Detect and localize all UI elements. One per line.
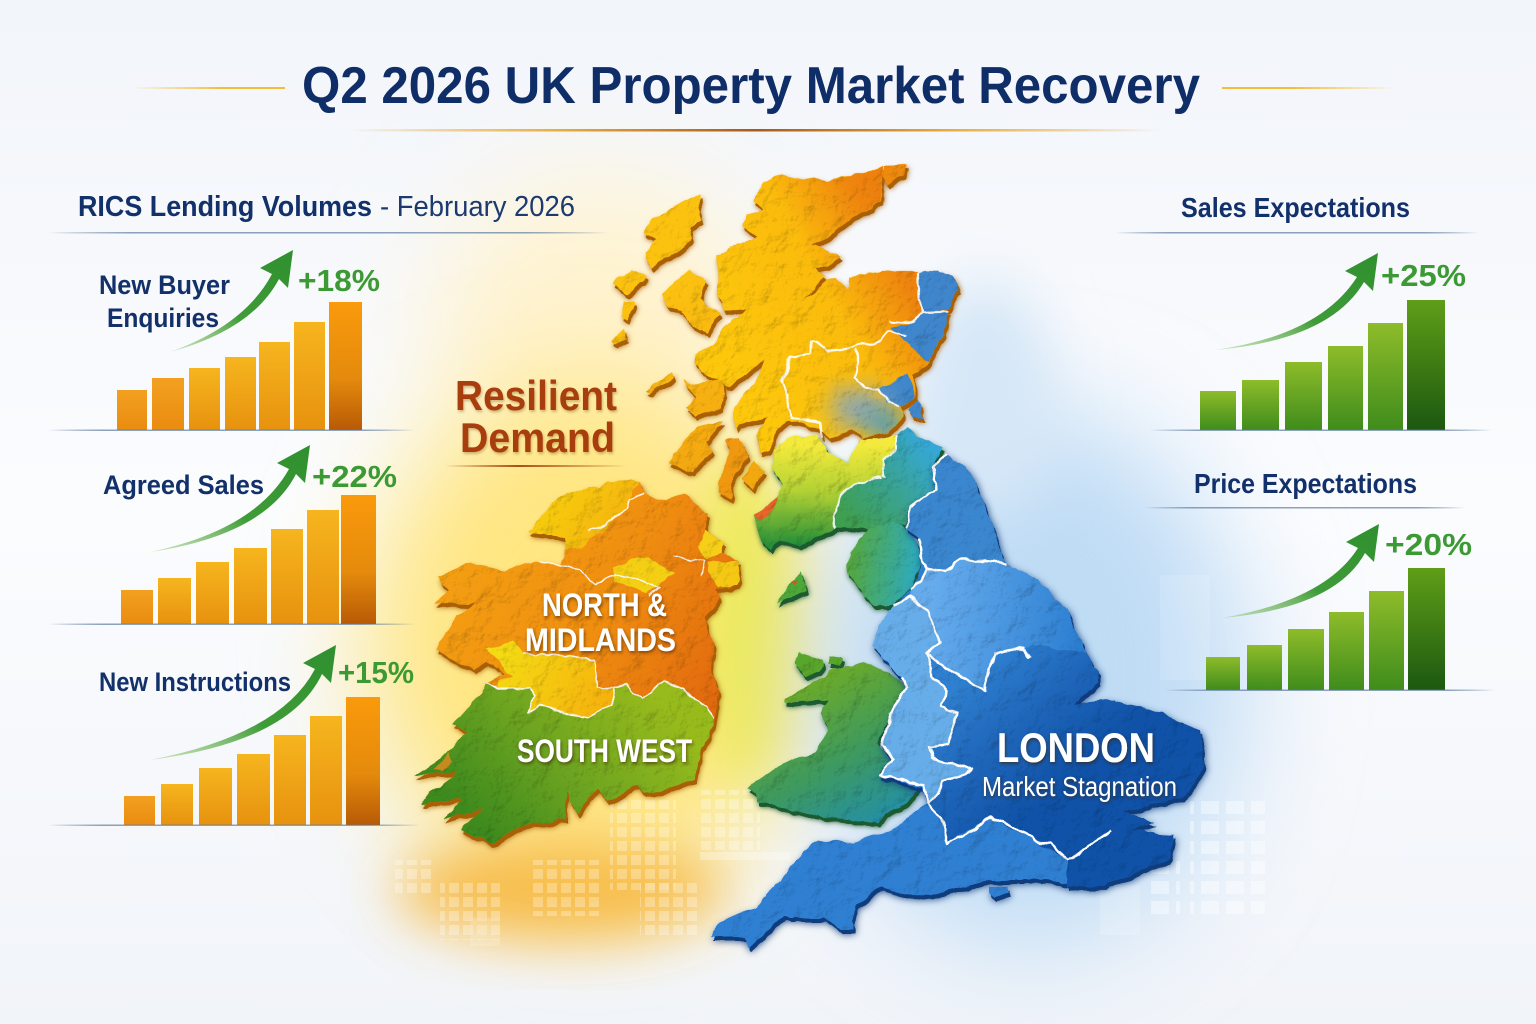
bars: Agreed Sales: [121, 495, 376, 624]
map: Scotland: [613, 163, 958, 500]
label: New Instructions: New Instructions: [99, 667, 291, 697]
map: Ireland: [413, 480, 740, 843]
title rule: right: [1222, 87, 1397, 89]
arrow: Sales Expectations: [1215, 253, 1378, 350]
heading: RICS Lending Volumes: RICS Lending Volumes: [78, 191, 372, 223]
label: Agreed Sales: Agreed Sales: [103, 470, 264, 500]
map: southern Scotland and northern England west: [753, 428, 943, 605]
map: England: [710, 453, 1205, 948]
label: North & Midlands: MIDLANDS: [525, 622, 676, 658]
value: +15%: +15%: [338, 655, 414, 690]
bars: New Buyer Enquiries: [117, 302, 362, 430]
label: North & Midlands: NORTH &: [542, 587, 667, 623]
map: Wales: [747, 652, 920, 823]
heading: RICS Lending Volumes: [78, 191, 575, 223]
arrow: Agreed Sales: [150, 445, 310, 552]
panel: Price Expectations: [1145, 468, 1495, 691]
arrow: New Instructions: [150, 645, 336, 760]
value: +18%: +18%: [298, 263, 380, 298]
label: New Buyer Enquiries: New Buyer: [99, 270, 230, 300]
heading: Sales Expectations: Sales Expectations: [1181, 192, 1410, 223]
label: London: Market Stagnation: [982, 771, 1177, 802]
title underline: [350, 129, 1160, 132]
Resilient Demand underline: [445, 465, 627, 467]
arrow: Price Expectations: [1222, 524, 1379, 618]
label: London: LONDON: [997, 724, 1155, 771]
bars: Price Expectations: [1206, 568, 1445, 690]
label: Resilient Demand: Demand: [460, 414, 615, 461]
title: Q2 2026 UK Property Market Recovery: [302, 57, 1200, 115]
heading: RICS Lending Volumes: - February 2026: [380, 191, 575, 223]
city skyline: left: [395, 790, 790, 946]
value: +25%: +25%: [1381, 258, 1466, 293]
bars: Sales Expectations: [1200, 300, 1445, 430]
title rule: left: [130, 87, 285, 89]
label: Resilient Demand: [455, 372, 617, 461]
panel: Agreed Sales: [48, 445, 415, 625]
bars: New Instructions: [124, 697, 380, 825]
label: North & Midlands: [525, 587, 676, 658]
panel: Sales Expectations: [1115, 192, 1492, 431]
label: Resilient Demand: Resilient: [455, 372, 617, 419]
city skyline: right: [1100, 575, 1265, 935]
value: +20%: +20%: [1385, 527, 1472, 562]
label: New Buyer Enquiries: Enquiries: [107, 303, 219, 333]
value: +22%: +22%: [312, 459, 397, 494]
panel: New Buyer Enquiries: [48, 250, 415, 431]
label: London: [982, 724, 1177, 802]
panel: New Instructions: [48, 645, 420, 826]
arrow: New Buyer Enquiries: [170, 250, 293, 352]
heading: Price Expectations: Price Expectations: [1194, 468, 1417, 499]
label: New Buyer Enquiries: [99, 270, 230, 333]
label: South West: SOUTH WEST: [517, 733, 692, 769]
